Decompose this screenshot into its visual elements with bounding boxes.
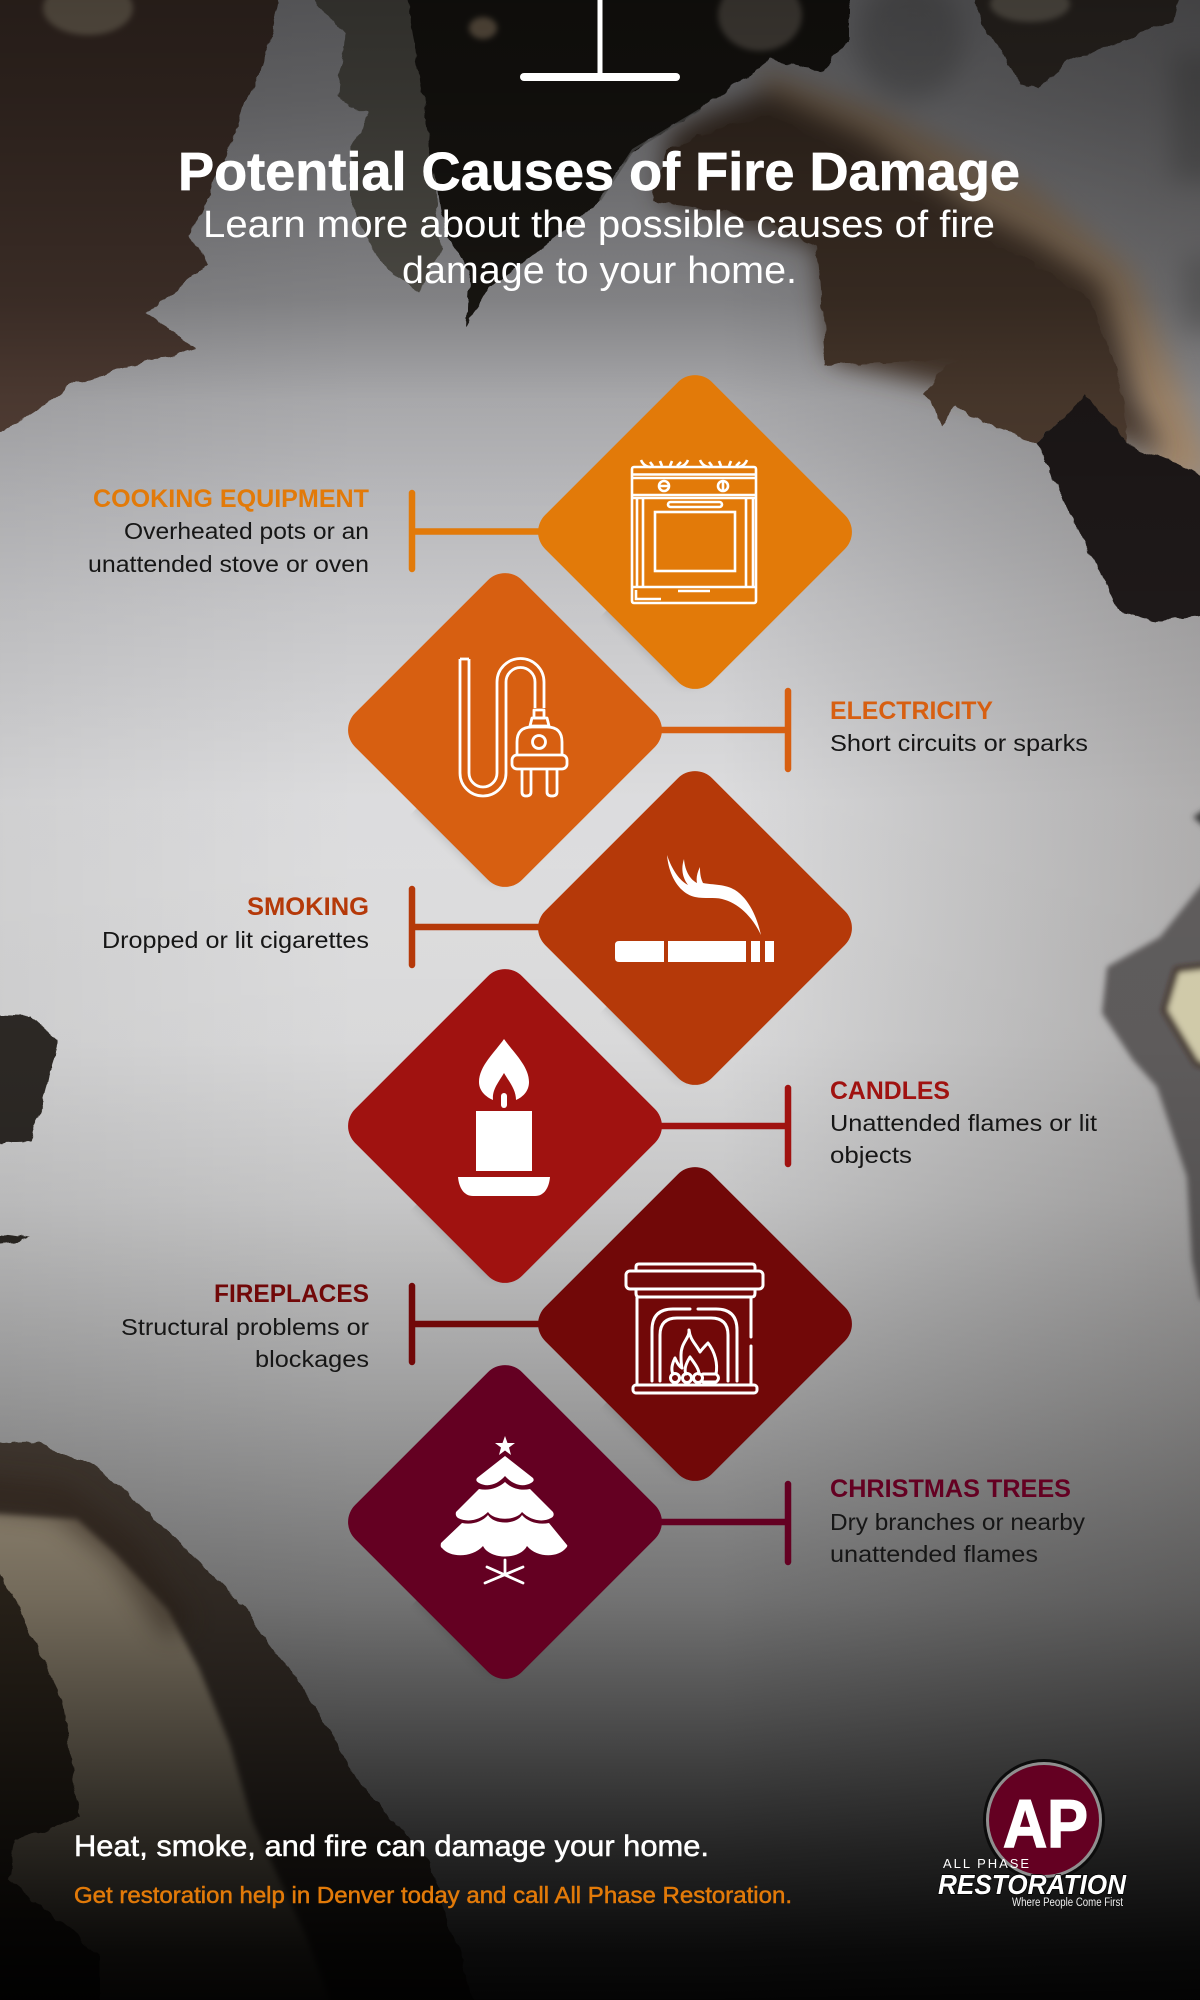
label: candles: Unattended flames or lit <box>830 1110 1098 1136</box>
logo: All Phase Restoration <box>938 1759 1127 1909</box>
label: electricity: Short circuits or sparks <box>830 730 1088 756</box>
footer message <box>74 1830 792 1908</box>
footer message: Get restoration help in Denver today and call All Phase Restoration. <box>74 1882 792 1908</box>
label: cooking equipment: Overheated pots or an <box>124 518 369 544</box>
label: christmas trees: unattended flames <box>830 1541 1038 1567</box>
logo: All Phase Restoration: ALL PHASE <box>943 1856 1029 1871</box>
label: christmas trees: CHRISTMAS TREES <box>830 1475 1071 1503</box>
icon: fireplace <box>626 1264 763 1393</box>
label: cooking equipment: unattended stove or oven <box>88 551 369 577</box>
logo: All Phase Restoration: AP <box>1003 1786 1088 1862</box>
connector <box>412 493 545 569</box>
label: smoking: SMOKING <box>247 893 369 921</box>
label: fireplaces: blockages <box>255 1346 369 1372</box>
gray smoke patches, top <box>855 0 965 100</box>
label: candles <box>830 1077 1098 1168</box>
item: electricity <box>332 559 788 897</box>
light spots in the burn <box>43 0 133 35</box>
connector <box>412 889 545 965</box>
connector <box>655 691 788 769</box>
label: cooking equipment <box>88 485 369 577</box>
diamond shadow <box>522 361 856 695</box>
icon: candle <box>458 1039 550 1196</box>
label: candles: CANDLES <box>830 1077 950 1105</box>
subtitle: Learn more about the possible causes of fire <box>203 204 995 246</box>
icon: oven <box>632 460 756 603</box>
label: fireplaces: Structural problems or <box>121 1314 369 1340</box>
diamond <box>528 1157 862 1491</box>
label: smoking: Dropped or lit cigarettes <box>102 927 369 953</box>
diamond shadow <box>522 757 856 1091</box>
logo: All Phase Restoration: RESTORATION <box>938 1869 1127 1900</box>
label: smoking <box>102 893 369 953</box>
title: Potential Causes of Fire Damage <box>178 142 1020 202</box>
paper hole, right <box>1165 965 1200 1070</box>
tan scorch, top right <box>760 70 1200 480</box>
item: candles <box>332 955 788 1293</box>
connector <box>412 1286 545 1362</box>
item: smoking <box>412 757 862 1095</box>
gray shadow at the right <box>1102 860 1200 1300</box>
item: fireplaces <box>412 1153 862 1491</box>
diamond shadow <box>332 955 666 1289</box>
diamond shadow <box>522 1153 856 1487</box>
diamond <box>528 761 862 1095</box>
label: electricity: ELECTRICITY <box>830 697 993 725</box>
label: cooking equipment: COOKING EQUIPMENT <box>93 485 369 513</box>
label: candles: objects <box>830 1142 912 1168</box>
icon: plug <box>460 658 567 796</box>
footer message: Heat, smoke, and fire can damage your home. <box>74 1830 709 1863</box>
icon: cigarette <box>615 855 774 962</box>
label: electricity <box>830 697 1088 756</box>
item: christmas trees <box>332 1351 788 1689</box>
connector <box>655 1088 788 1164</box>
label: christmas trees: Dry branches or nearby <box>830 1509 1086 1535</box>
top T connector <box>520 0 680 81</box>
connector <box>655 1484 788 1562</box>
label: fireplaces <box>121 1280 369 1372</box>
icon: christmas tree <box>441 1436 567 1583</box>
diamond <box>338 563 672 897</box>
subtitle <box>203 204 995 292</box>
label: fireplaces: FIREPLACES <box>214 1280 369 1308</box>
diamond shadow <box>332 559 666 893</box>
diamond shadow <box>332 1351 666 1685</box>
diamond <box>338 959 672 1293</box>
label: christmas trees <box>830 1475 1086 1567</box>
diamond <box>528 365 862 699</box>
diamond <box>338 1355 672 1689</box>
logo: All Phase Restoration: Where People Come First <box>1012 1897 1124 1909</box>
lower-left tan paper <box>0 1511 344 2000</box>
item: cooking equipment <box>412 361 862 699</box>
soft brown scorch <box>660 91 1163 456</box>
subtitle: damage to your home. <box>402 250 797 292</box>
